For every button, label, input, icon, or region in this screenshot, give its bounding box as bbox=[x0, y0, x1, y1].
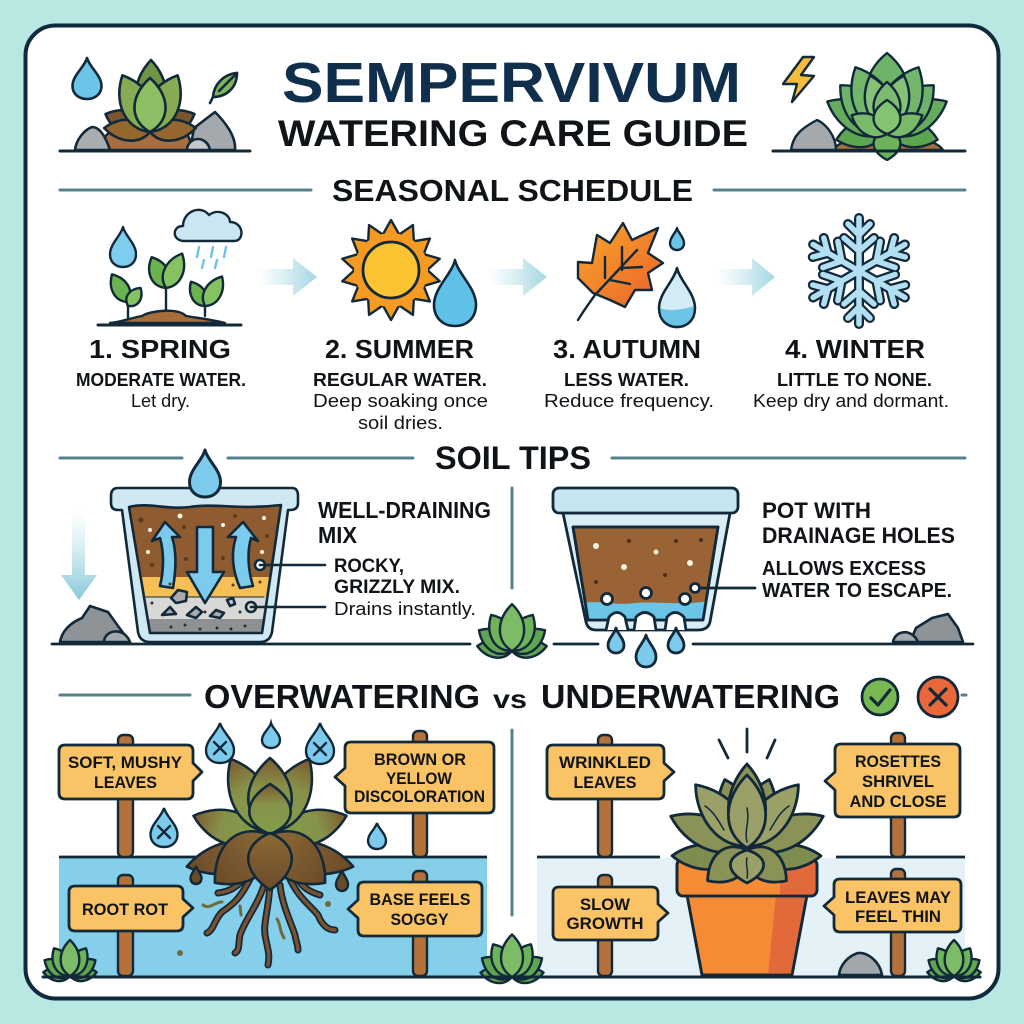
icon: left header rosette on rocks bbox=[60, 58, 250, 151]
text: pot with drainage holes: DRAINAGE HOLES bbox=[762, 523, 955, 548]
icon: rock left bbox=[60, 606, 130, 642]
arrow: spring to summer bbox=[258, 258, 317, 296]
illustration: underwatered plant in pot bbox=[664, 729, 830, 975]
icon: check badge bbox=[862, 679, 898, 715]
icon: summer sun and drop bbox=[340, 220, 476, 326]
text: autumn bbox=[544, 334, 714, 411]
icon: bottom-left rosette bbox=[40, 940, 100, 983]
text: well-draining mix bbox=[318, 497, 491, 619]
illustration: pot with drainage holes bbox=[553, 488, 755, 667]
sign: wrinkled leaves bbox=[547, 745, 674, 799]
sign: brown or yellow discoloration: YELLOW bbox=[386, 769, 453, 788]
sign: slow growth: GROWTH bbox=[566, 914, 644, 933]
icon: autumn leaf and drops bbox=[578, 223, 695, 327]
sign: rosettes shrivel and close: ROSETTES bbox=[855, 752, 941, 771]
sign: slow growth bbox=[553, 887, 668, 940]
text: spring: 1. SPRING bbox=[89, 334, 231, 364]
text: pot with drainage holes: ALLOWS EXCESS bbox=[762, 558, 926, 580]
title: WATERING CARE GUIDE bbox=[278, 113, 748, 154]
sign posts bbox=[118, 731, 905, 976]
sign: brown or yellow discoloration bbox=[335, 742, 494, 813]
sign: root rot: ROOT ROT bbox=[82, 900, 169, 919]
sign: wrinkled leaves: LEAVES bbox=[574, 773, 636, 792]
text: pot with drainage holes: POT WITH bbox=[762, 498, 871, 523]
heading: overwatering vs underwatering bbox=[60, 678, 966, 715]
text: autumn: Reduce frequency. bbox=[544, 391, 714, 411]
text: winter: 4. WINTER bbox=[785, 334, 925, 364]
ground line: soil left bbox=[52, 643, 973, 645]
vertical divider: comparison bbox=[510, 730, 514, 915]
sign: rosettes shrivel and close bbox=[825, 744, 960, 817]
sign: soft, mushy leaves bbox=[59, 745, 202, 799]
water band: underwatering bbox=[537, 858, 965, 976]
text: well-draining mix: GRIZZLY MIX. bbox=[334, 577, 460, 598]
vertical divider: soil tips bbox=[510, 488, 514, 588]
sign: base feels soggy: SOGGY bbox=[390, 910, 449, 929]
icon: rock in underwatering band bbox=[839, 953, 882, 975]
sign: brown or yellow discoloration: DISCOLORATION bbox=[354, 787, 485, 806]
text: well-draining mix: Drains instantly. bbox=[334, 599, 476, 619]
sign: soft, mushy leaves: SOFT, MUSHY bbox=[68, 753, 183, 772]
text: summer: soil dries. bbox=[358, 413, 443, 433]
text: winter: LITTLE TO NONE. bbox=[777, 370, 932, 390]
text: autumn: 3. AUTUMN bbox=[553, 334, 701, 364]
arrow: summer to autumn bbox=[488, 258, 547, 296]
title: SEMPERVIVUM bbox=[282, 51, 741, 115]
heading: soil tips: SOIL TIPS bbox=[435, 440, 591, 476]
sign: leaves may feel thin: LEAVES MAY bbox=[845, 888, 952, 907]
text: spring: MODERATE WATER. bbox=[76, 370, 246, 390]
text: winter bbox=[753, 334, 949, 411]
icon: bottom-right rosette bbox=[924, 940, 984, 983]
sign: leaves may feel thin: FEEL THIN bbox=[855, 907, 941, 926]
sign: rosettes shrivel and close: SHRIVEL bbox=[862, 772, 934, 791]
icon: bottom-center rosette bbox=[477, 935, 547, 985]
heading: overwatering vs underwatering: OVERWATERING bbox=[204, 678, 480, 715]
arrow: drainage down bbox=[61, 510, 97, 600]
icon: cross badge bbox=[918, 677, 958, 717]
heading: overwatering vs underwatering: UNDERWATERING bbox=[541, 678, 840, 715]
text: summer: REGULAR WATER. bbox=[313, 370, 487, 390]
panel top lines bbox=[59, 856, 965, 858]
icon: lightning bolt bbox=[783, 57, 814, 102]
icon: water drops with crosses bbox=[150, 723, 386, 849]
text: summer: Deep soaking once bbox=[313, 391, 488, 411]
icon: right header rosette on rock bbox=[773, 53, 965, 160]
arrow: autumn to winter bbox=[717, 258, 775, 296]
icon: winter snowflake bbox=[806, 218, 912, 324]
sign: rosettes shrivel and close: AND CLOSE bbox=[850, 792, 946, 811]
text: well-draining mix: WELL-DRAINING bbox=[318, 497, 491, 523]
text: pot with drainage holes: WATER TO ESCAPE. bbox=[762, 580, 952, 602]
title bbox=[278, 51, 748, 154]
text: well-draining mix: MIX bbox=[318, 522, 358, 548]
sign: soft, mushy leaves: LEAVES bbox=[94, 773, 157, 792]
sign: wrinkled leaves: WRINKLED bbox=[559, 753, 651, 772]
sign: slow growth: SLOW bbox=[580, 895, 631, 914]
text: summer bbox=[313, 334, 488, 433]
ground line: bottom bbox=[43, 976, 980, 978]
sign: root rot bbox=[69, 886, 193, 931]
heading: overwatering vs underwatering: vs bbox=[493, 684, 527, 714]
text: autumn: LESS WATER. bbox=[564, 370, 689, 390]
water band: overwatering bbox=[59, 857, 487, 976]
icon: center rosette soil bbox=[473, 604, 551, 660]
sign: base feels soggy bbox=[348, 882, 482, 936]
illustration: overwatered rosette with roots bbox=[177, 750, 356, 965]
text: spring bbox=[76, 334, 246, 411]
sign: leaves may feel thin bbox=[824, 879, 961, 932]
text: well-draining mix: ROCKY, bbox=[334, 556, 404, 577]
sign: brown or yellow discoloration: BROWN OR bbox=[374, 750, 466, 769]
text: winter: Keep dry and dormant. bbox=[753, 391, 949, 411]
heading: seasonal schedule: SEASONAL SCHEDULE bbox=[332, 173, 693, 208]
icon: rock right bbox=[893, 614, 963, 642]
text: pot with drainage holes bbox=[762, 498, 955, 602]
sign: base feels soggy: BASE FEELS bbox=[370, 890, 470, 909]
text: spring: Let dry. bbox=[131, 391, 190, 411]
text: summer: 2. SUMMER bbox=[325, 334, 474, 364]
illustration: well-draining pot bbox=[111, 450, 325, 642]
icon: spring sprouts with rain bbox=[98, 210, 241, 325]
